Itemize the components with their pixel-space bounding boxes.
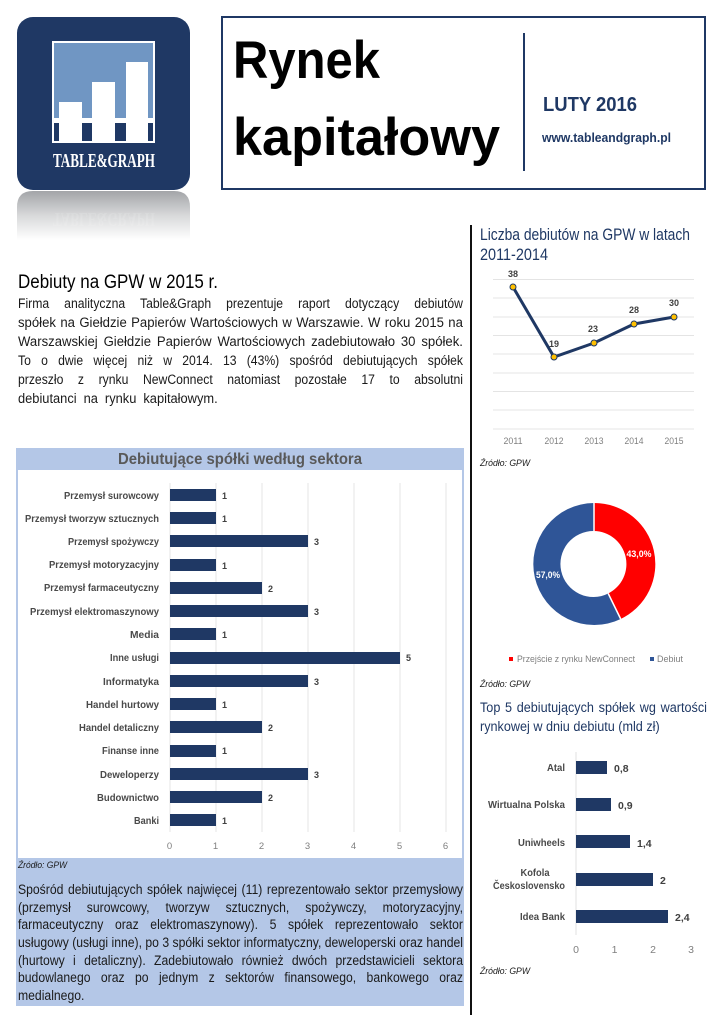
bar chart: sectors: 2 [268,793,273,803]
title: Rynek [233,31,380,90]
bar chart: sectors: Budownictwo [97,793,159,804]
bar chart: sectors [25,483,448,852]
sector text [18,882,464,1003]
column divider [470,225,472,1015]
logo: Table&Graph: TABLE&GRAPH [53,150,155,172]
bar chart: sectors: Przemysł farmaceutyczny [44,583,159,594]
bar chart: sectors: 1 [222,561,227,571]
panel: sectors [16,448,464,1006]
bar chart: top 5: 2 [660,875,666,887]
intro text: Firma analityczna Table&Graph prezentuje raport dotyczący debiutów [18,296,463,311]
bar chart: top 5: Idea Bank [520,912,565,923]
top 5 heading [480,700,707,735]
bar chart: sectors: 1 [222,491,227,501]
bar chart: top 5: Uniwheels [518,838,565,849]
intro text: spółek na Giełdzie Papierów Wartościowych w Warszawie. W roku 2015 na [18,315,463,330]
bar chart: sectors: 3 [314,677,319,687]
bar chart: top 5: Kofola [520,868,550,879]
donut chart: 43,0% [626,549,652,559]
line chart: debuts per year: 2014 [624,436,644,447]
sector text: (przemysł surowcowy, tworzyw sztucznych, spożywczy, motoryzacyjny, [18,900,463,914]
bar chart: sectors: Banki [134,816,159,827]
bar chart: sectors: Handel detaliczny [79,723,159,734]
bar chart: sectors: Przemysł motoryzacyjny [49,560,159,571]
bar chart: sectors: 1 [222,816,227,826]
bar chart: sectors: 1 [222,700,227,710]
bar chart: top 5: Atal [547,763,565,774]
sector text: farmaceutyczny oraz elektromaszynowy). 5 spółek reprezentowało sektor [18,917,463,932]
title: kapitałowy [233,108,501,167]
bar chart: sectors: Media [130,630,159,641]
logo reflection [17,191,190,240]
bar chart: sectors: Deweloperzy [100,770,159,781]
bar chart: sectors: 3 [314,770,319,780]
sector text: budowlanego oraz po jednym z sektorów finansowego, bankowego oraz [18,970,463,985]
intro text: To o dwie więcej niż w 2014. 13 (43%) spośród debiutujących spółek [18,353,463,368]
bar chart: top 5: 1 [612,944,618,956]
bar chart: sectors: Handel hurtowy [86,700,159,711]
source note: Źródło: GPW [479,458,531,469]
panel heading: Debiutujące spółki według sektora [118,451,362,468]
line chart: debuts per year: 2011 [504,436,522,447]
bar chart: sectors: 3 [314,537,319,547]
bar chart: top 5 [488,752,694,956]
bar chart: sectors: 2 [259,841,264,852]
bar chart: sectors: 3 [314,607,319,617]
website: www.tableandgraph.pl [541,130,671,145]
bar chart: sectors: 5 [397,841,402,852]
bar chart: top 5: 2 [650,944,656,956]
line chart heading: Liczba debiutów na GPW w latach [480,226,690,244]
line chart: debuts per year: 30 [669,298,679,308]
bar chart: top 5: Wirtualna Polska [488,800,565,811]
line chart: debuts per year: 23 [588,324,598,334]
legend: Debiut [657,654,683,665]
bar chart: sectors: Inne usługi [110,653,159,664]
bar chart: top 5: 1,4 [637,838,652,850]
bar chart: sectors: 1 [222,630,227,640]
line chart: debuts per year: 2015 [664,436,684,447]
line chart: debuts per year: 28 [629,305,639,315]
bar chart: top 5: 0,8 [614,763,629,775]
intro text: przeszło z rynku NewConnect natomiast pozostałe 17 to absolutni [18,372,463,387]
intro heading: Debiuty na GPW w 2015 r. [18,272,218,293]
logo reflection: TABLE&GRAPH [53,208,155,230]
bar chart: sectors: 6 [443,841,448,852]
bar chart: sectors: 1 [222,514,227,524]
sector text: (hurtowy i detaliczny). Zadebiutowało również dwóch przedstawicieli sektora [18,952,463,968]
bar chart: sectors: 2 [268,584,273,594]
intro text [18,296,463,406]
donut chart [509,503,683,665]
bar chart: sectors: Informatyka [103,677,159,688]
date: LUTY 2016 [543,94,637,116]
bar chart: sectors: 3 [305,841,310,852]
source note: Źródło: GPW [479,966,531,977]
source note: Źródło: GPW [17,860,68,871]
line chart: debuts per year: 19 [549,339,559,349]
bar chart: sectors: 1 [222,746,227,756]
title [233,31,501,167]
sector text: usługowy (usługi inne), po 3 spółki sektor informatyczny, deweloperski oraz handel [18,935,463,950]
bar chart: top 5: 2,4 [675,912,690,924]
line chart: debuts per year: 2012 [544,436,564,447]
bar chart: sectors: Przemysł spożywczy [68,537,159,548]
bar chart: sectors: 1 [213,841,218,852]
bar chart: sectors: 5 [406,653,411,663]
bar chart: sectors: 2 [268,723,273,733]
top 5 heading: Top 5 debiutujących spółek wg wartości [480,700,707,716]
bar chart: sectors: Finanse inne [102,746,159,757]
line chart heading [480,226,690,264]
sector text: Spośród debiutujących spółek najwięcej (11) reprezentowało sektor przemysłowy [18,882,463,897]
bar chart: top 5: 0 [573,944,579,956]
line chart: debuts per year: 2013 [584,436,604,447]
line chart heading: 2011-2014 [480,246,548,264]
bar chart: sectors: Przemysł surowcowy [64,491,159,502]
intro text: debiutanci na rynku kapitałowym. [18,391,218,406]
logo: Table&Graph [17,17,190,190]
intro text: Warszawskiej Giełdzie Papierów Wartościowych zadebiutowało 30 spółek. [18,334,463,349]
bar chart: sectors: Przemysł tworzyw sztucznych [25,514,159,525]
bar chart: sectors: 0 [167,841,172,852]
source note: Źródło: GPW [479,679,531,690]
bar chart: sectors: Przemysł elektromaszynowy [30,607,159,618]
donut chart: 57,0% [536,570,560,580]
title box [222,17,705,189]
bar chart: sectors: 4 [351,841,356,852]
line chart: debuts per year [493,269,694,447]
top 5 heading: rynkowej w dniu debiutu (mld zł) [480,719,660,735]
line chart: debuts per year: 38 [508,269,518,279]
legend: Przejście z rynku NewConnect [517,654,635,665]
bar chart: top 5: 0,9 [618,800,633,812]
sector text: medialnego. [18,988,84,1003]
bar chart: top 5: 3 [688,944,694,956]
bar chart: top 5: Československo [493,879,565,892]
